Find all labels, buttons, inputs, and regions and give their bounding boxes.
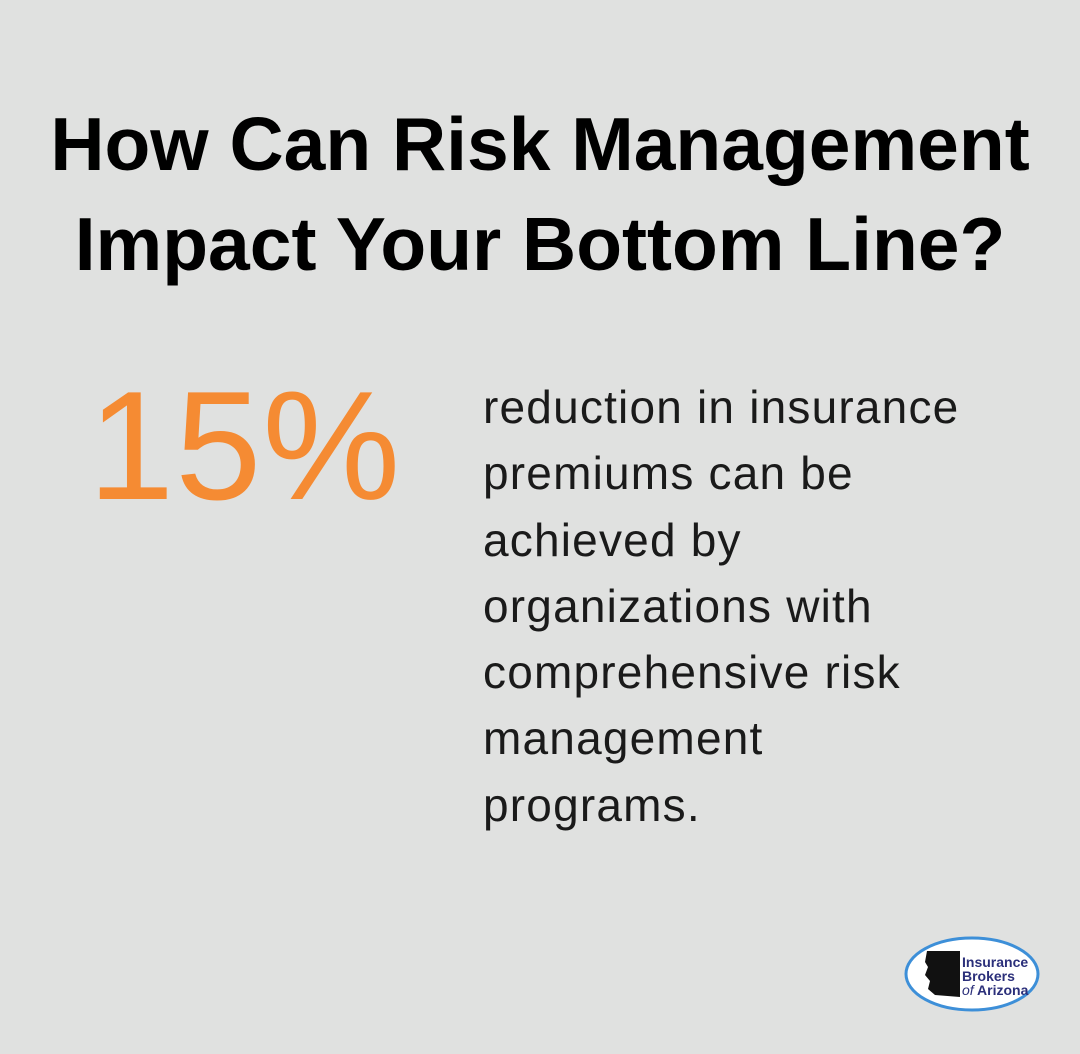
- stat description: premiums can be: [483, 447, 854, 499]
- stat description: organizations with: [483, 580, 873, 632]
- logo: Insurance Brokers of Arizona: Brokers: [962, 968, 1015, 984]
- logo: Insurance Brokers of Arizona: of Arizona: [962, 982, 1029, 998]
- title: [50, 102, 1030, 286]
- logo: Insurance Brokers of Arizona: [904, 936, 1040, 1012]
- stat description: [483, 381, 959, 831]
- title: Impact Your Bottom Line?: [75, 202, 1005, 286]
- stat description: comprehensive risk: [483, 646, 901, 698]
- stat description: achieved by: [483, 514, 742, 566]
- stat description: management: [483, 712, 764, 764]
- stat description: reduction in insurance: [483, 381, 959, 433]
- stat description: programs.: [483, 779, 701, 831]
- title: How Can Risk Management: [50, 102, 1030, 186]
- logo: Insurance Brokers of Arizona: Insurance: [962, 954, 1028, 970]
- stat number: 15%: [88, 359, 401, 532]
